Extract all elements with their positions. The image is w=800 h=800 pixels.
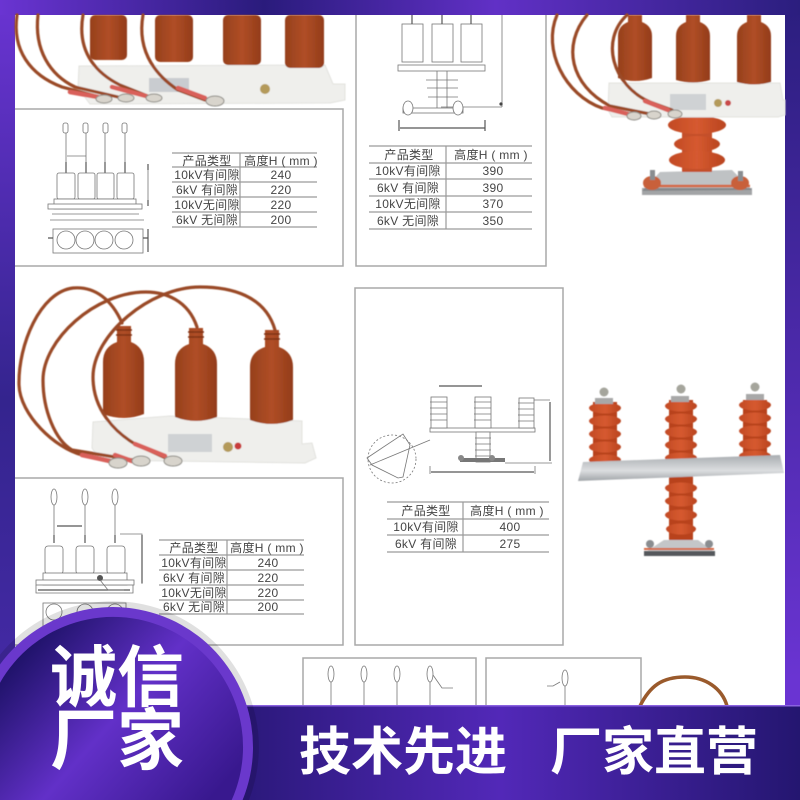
- table: crossarm heights: 400: [500, 520, 520, 534]
- table: four-pole heights: 220: [271, 198, 291, 212]
- photo: wire arc: [640, 677, 727, 706]
- panel outline: [15, 109, 343, 266]
- panel: crossarm drawing centre: [355, 288, 563, 645]
- table: three-pole heights: 6kV 无间隙: [163, 600, 225, 614]
- technical drawing: three-pole: [36, 489, 142, 628]
- table: four-pole heights: 200: [271, 213, 291, 227]
- table: four-pole heights: 220: [271, 183, 291, 197]
- banner slogan right: 厂家直营: [550, 724, 758, 782]
- table: three-pole heights: 200: [258, 600, 278, 614]
- panel: pole-mounted arrester drawing top centre: [356, 15, 546, 266]
- table: four-pole heights: 10kV有间隙: [174, 168, 240, 182]
- table: crossarm heights: 10kV有间隙: [393, 520, 459, 534]
- photo: crossarm arrester right: [578, 382, 784, 556]
- table: pole-mounted heights: 10kV无间隙: [375, 197, 441, 211]
- technical drawing: pole-mounted: [398, 15, 503, 131]
- table: four-pole heights: 240: [271, 168, 291, 182]
- table: four-pole heights: 6kV 有间隙: [176, 183, 238, 197]
- technical drawing: four-pole: [48, 123, 148, 253]
- table: four-pole heights: 6kV 无间隙: [176, 213, 238, 227]
- table: pole-mounted heights: 350: [483, 214, 503, 228]
- table: crossarm heights: [387, 502, 549, 552]
- badge: circular seal: [0, 601, 259, 800]
- table: four-pole heights: 产品类型: [182, 154, 232, 168]
- table: pole-mounted heights: 370: [483, 197, 503, 211]
- technical drawing: crossarm: [367, 386, 552, 483]
- table: three-pole heights: 220: [258, 586, 278, 600]
- photo: four-pole arrester: [16, 15, 345, 106]
- table: pole-mounted heights: 6kV 无间隙: [377, 214, 439, 228]
- panel outline: single-terminal drawing: [486, 658, 641, 718]
- table: pole-mounted heights: 高度H ( mm ): [454, 147, 528, 162]
- table: four-pole heights: 高度H ( mm ): [244, 153, 318, 168]
- table: three-pole heights: 220: [258, 571, 278, 585]
- table: three-pole heights: 10kV有间隙: [161, 556, 227, 570]
- table: four-pole heights: [172, 153, 318, 227]
- table: pole-mounted heights: [369, 146, 532, 229]
- badge text line 2: 厂家: [50, 704, 184, 779]
- banner: bottom strip: [200, 705, 800, 800]
- table: pole-mounted heights: 390: [483, 181, 503, 195]
- table: crossarm heights: 高度H ( mm ): [470, 503, 544, 518]
- table: pole-mounted heights: 10kV有间隙: [375, 164, 441, 178]
- panel: three-pole drawing centre left: [15, 478, 343, 645]
- banner slogan left: 技术先进: [299, 724, 507, 782]
- table: three-pole heights: 10kV无间隙: [161, 586, 227, 600]
- badge text line 1: 诚信: [50, 641, 184, 716]
- panels: bottom drawings: [303, 658, 727, 718]
- table: crossarm heights: 6kV 有间隙: [395, 537, 457, 551]
- table: crossarm heights: 产品类型: [401, 504, 451, 518]
- table: pole-mounted heights: 产品类型: [384, 148, 434, 162]
- table: three-pole heights: 产品类型: [169, 541, 219, 555]
- table: pole-mounted heights: 6kV 有间隙: [377, 181, 439, 195]
- table: four-pole heights: 10kV无间隙: [174, 198, 240, 212]
- panel outline: four-terminal drawing: [303, 658, 476, 718]
- panel outline: [356, 15, 546, 266]
- table: three-pole heights: 高度H ( mm ): [230, 540, 304, 555]
- photo: pole-mounted arrester top right: [552, 15, 785, 195]
- photo: three-pole arrester centre left: [19, 287, 316, 468]
- table: three-pole heights: 240: [258, 556, 278, 570]
- table: three-pole heights: [159, 540, 304, 614]
- table: three-pole heights: 6kV 有间隙: [163, 571, 225, 585]
- panel: four-pole arrester top left: [15, 15, 345, 266]
- panel outline: [15, 478, 343, 645]
- panel outline: [355, 288, 563, 645]
- table: crossarm heights: 275: [500, 537, 520, 551]
- table: pole-mounted heights: 390: [483, 164, 503, 178]
